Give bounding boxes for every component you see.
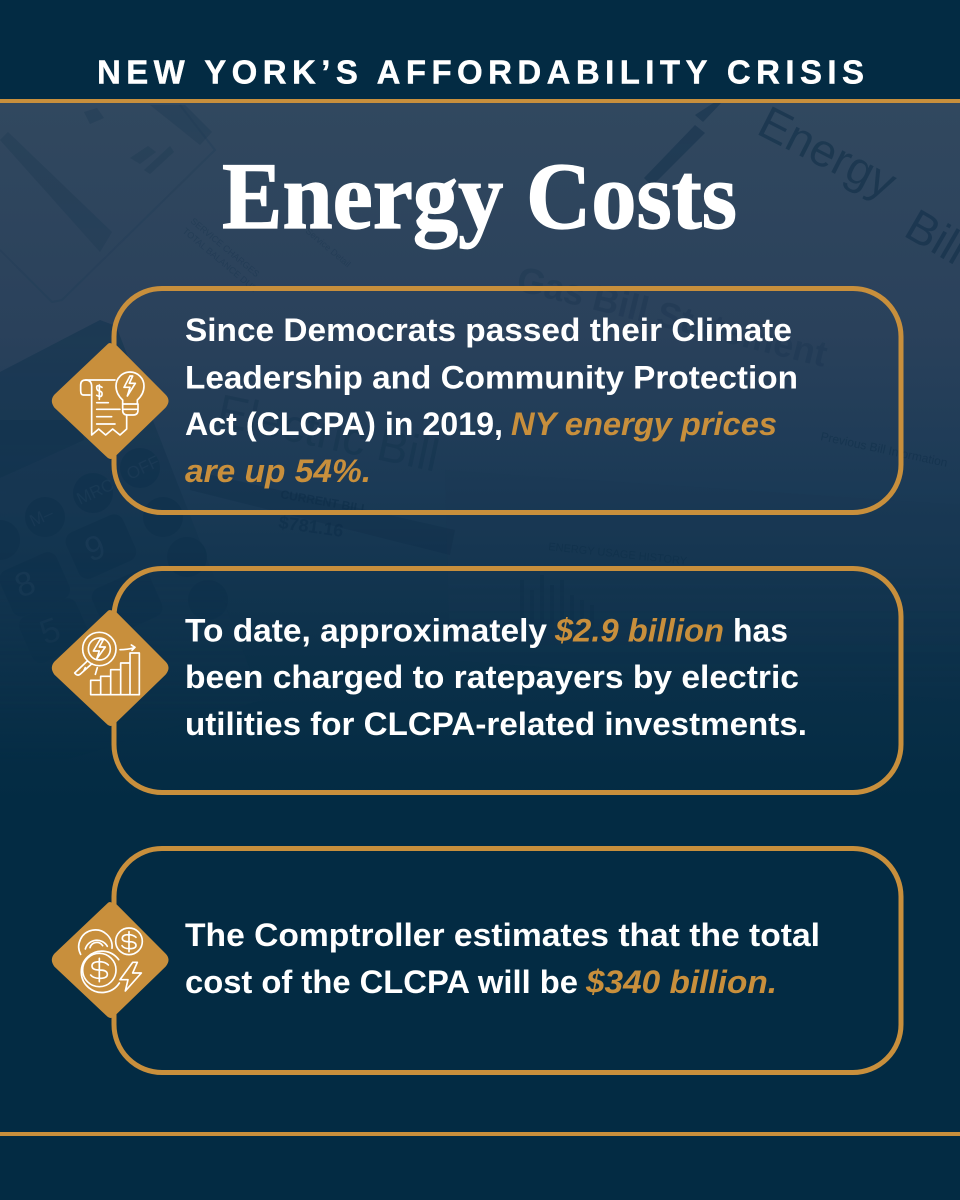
background photo of energy bills — [0, 103, 960, 686]
card 1 text: Act (CLCPA) in 2019, — [185, 406, 503, 442]
card 1 text — [185, 312, 798, 489]
card 3 text: cost of the CLCPA will be — [185, 964, 578, 1000]
card 1 text: are up 54%. — [185, 453, 371, 489]
background photo of energy bills: 8 — [10, 563, 41, 606]
card outline 1 — [114, 288, 901, 512]
background photo of energy bills: SERVICE CHARGES — [189, 216, 261, 279]
card 2 text: To date, approximately — [185, 612, 547, 648]
card 2 text — [185, 612, 807, 742]
card 1 text: Leadership and Community Protection — [185, 360, 798, 396]
icon: receipt and light bulb — [52, 344, 168, 458]
header label: NEW YORK’S AFFORDABILITY CRISIS — [97, 54, 864, 90]
title: Energy Costs — [222, 143, 737, 249]
card 3 text — [185, 917, 820, 1000]
background photo of energy bills: Gas Bill Statement — [513, 258, 832, 375]
bills — [445, 470, 960, 700]
card 2 text: $2.9 billion — [554, 612, 724, 648]
icon: coins and lightning bolt — [52, 903, 168, 1017]
card 2 text: been charged to ratepayers by electric — [185, 659, 799, 695]
background photo of energy bills: 9 — [80, 527, 111, 570]
top rule — [0, 99, 960, 103]
panel: $340 billion total cost — [52, 848, 901, 1072]
card outline 2 — [114, 568, 901, 792]
background photo of energy bills: Energy — [750, 96, 905, 209]
card 3 text: The Comptroller estimates that the total — [185, 917, 820, 953]
panel: $2.9 billion charged to ratepayers — [52, 568, 901, 792]
background photo of energy bills: ENERGY USAGE HISTORY — [548, 541, 688, 568]
card 2 text: utilities for CLCPA-related investments. — [185, 706, 807, 742]
upper-left document details — [0, 105, 212, 252]
background photo of energy bills: Service Detail — [304, 226, 353, 269]
card outline 3 — [114, 848, 901, 1072]
panel: energy prices up 54% — [52, 288, 901, 512]
background photo of energy bills: M– — [27, 503, 57, 531]
calculator — [0, 320, 154, 425]
background photo of energy bills: CURRENT BILL — [279, 487, 369, 516]
background photo of energy bills: 5 — [35, 610, 66, 653]
background photo of energy bills: OFF — [124, 452, 163, 484]
card 1 text: NY energy prices — [511, 406, 777, 442]
background photo of energy bills: TOTAL BALANCE DUE — [181, 226, 259, 294]
icon: magnifier and bar chart — [52, 611, 168, 725]
background photo of energy bills: Previous Bill Information — [819, 429, 949, 470]
bottom rule — [0, 1132, 960, 1136]
card 3 text: $340 billion. — [585, 964, 777, 1000]
background photo of energy bills: MRC — [74, 475, 117, 509]
background photo of energy bills: Electric Bill — [213, 384, 444, 482]
card 1 text: Since Democrats passed their Climate — [185, 312, 792, 348]
background photo of energy bills: $781.16 — [277, 512, 345, 541]
card 2 text: has — [733, 612, 788, 648]
